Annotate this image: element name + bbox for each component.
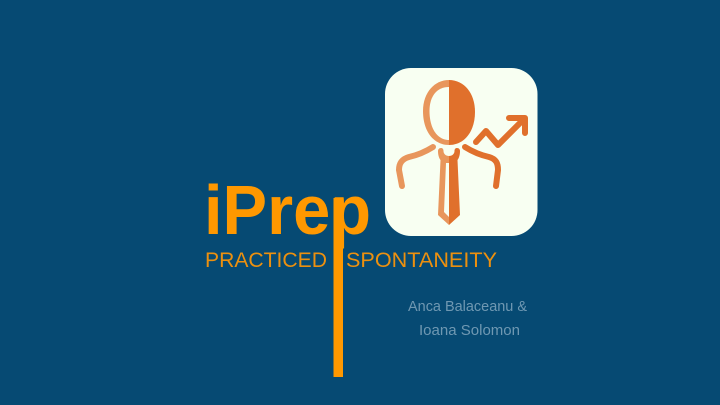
icon: left arm (399, 147, 433, 186)
icon: right arm (465, 147, 498, 186)
icon: tie (438, 148, 460, 225)
subtitle: practiced spontaneity: PRACTICED (205, 248, 327, 272)
icon: growth arrow (476, 118, 525, 145)
authors (408, 298, 527, 339)
authors: Ioana Solomon (419, 322, 520, 339)
subtitle: practiced spontaneity: SPONTANEITY (346, 248, 497, 272)
decorative p stem line (334, 198, 343, 377)
subtitle: practiced spontaneity (205, 248, 497, 272)
icon: app card with businessperson and growth arrow (385, 68, 538, 236)
authors: Anca Balaceanu & (408, 298, 527, 315)
icon: head (423, 80, 475, 145)
title: iPrep: iPrep (204, 171, 371, 249)
